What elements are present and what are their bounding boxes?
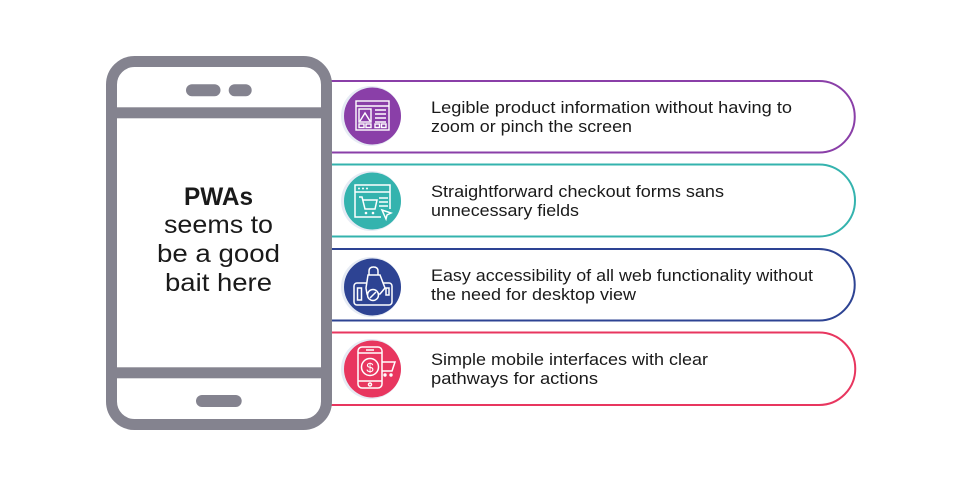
panel: purple pill bbox=[330, 81, 855, 152]
icon: navy mobile shopping bag bbox=[341, 257, 401, 317]
phone heading text: seems to bbox=[164, 211, 273, 239]
text: pink item: Simple mobile interfaces with clear bbox=[431, 351, 709, 369]
text: teal item: unnecessary fields bbox=[431, 202, 579, 220]
text: navy item: the need for desktop view bbox=[431, 286, 636, 304]
text: pink item: pathways for actions bbox=[431, 370, 598, 388]
icon: purple web layout bbox=[341, 86, 401, 146]
panel: navy pill bbox=[330, 249, 855, 320]
phone illustration bbox=[111, 62, 327, 424]
phone heading text: bait here bbox=[165, 269, 272, 297]
phone heading text: be a good bbox=[157, 240, 280, 268]
icon: teal checkout cart bbox=[341, 171, 401, 231]
text: navy item: Easy accessibility of all web functionality without bbox=[431, 267, 813, 285]
text: purple item: zoom or pinch the screen bbox=[431, 118, 632, 136]
panel: teal pill bbox=[330, 164, 855, 236]
icon: pink mobile payment bbox=[341, 339, 401, 399]
panel: pink pill bbox=[330, 332, 855, 405]
icon label: dollar sign: $ bbox=[366, 360, 374, 375]
text: teal item: Straightforward checkout forms sans bbox=[431, 183, 724, 201]
phone heading text: PWAs bbox=[184, 183, 253, 211]
text: purple item: Legible product information without having to bbox=[431, 99, 792, 117]
